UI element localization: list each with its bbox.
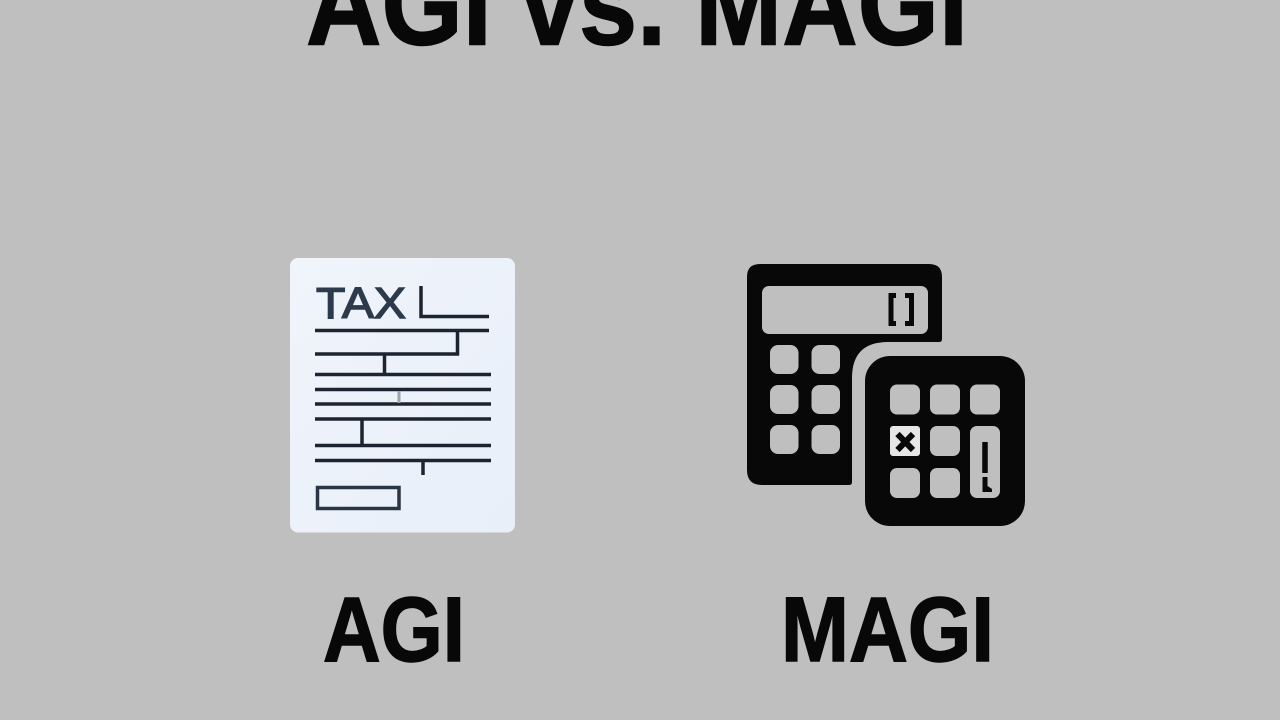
icon: tax document: TAX xyxy=(316,279,406,328)
icon: tax document xyxy=(290,258,515,532)
label: MAGI: MAGI xyxy=(781,579,994,681)
icon: calculators xyxy=(747,264,1025,526)
label: AGI: AGI xyxy=(323,579,465,681)
